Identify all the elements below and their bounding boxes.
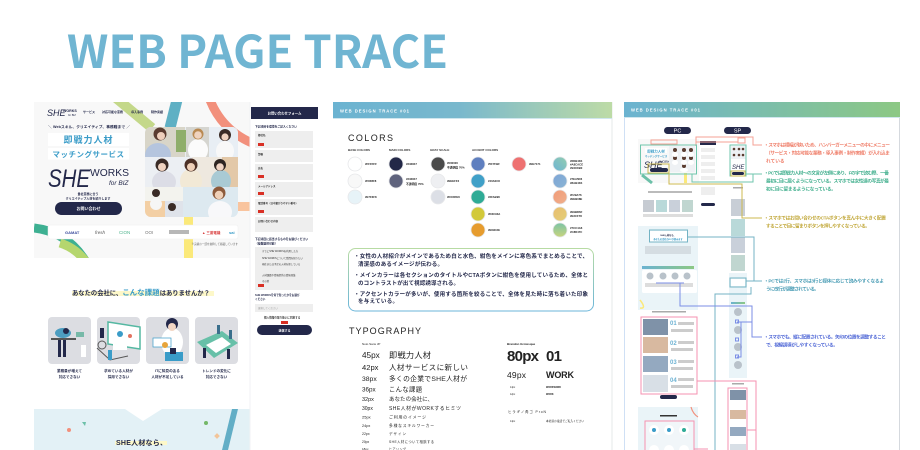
color codes: #A8CACE (570, 162, 583, 166)
form fields: 御社名 (258, 133, 266, 137)
hero photo collage (145, 127, 238, 223)
panel header (333, 102, 612, 119)
color codes: #EEEFF2 (447, 179, 460, 183)
SHE WORKS for BIZ logo: WORKS (90, 167, 129, 179)
type scale: Noto Sans JP: 22px (362, 432, 370, 436)
hero tagline: ＼ Webスキル、クリエイティブ、事務職まで ／ (48, 124, 130, 129)
type scale: Noto Sans JP: 25px (362, 414, 371, 420)
problem captions: 対応できない (59, 374, 81, 379)
problem captions: 業務量が増えて (57, 368, 82, 373)
panel header: WEB DESIGN TRACE #01 (340, 108, 410, 114)
PC problems thumbnail (643, 191, 693, 217)
PC benefits thumbnail (642, 311, 696, 399)
PC hero thumbnail: マッチングサービス (645, 154, 668, 158)
annotation connectors (640, 137, 762, 450)
design notes callout: ・アクセントカラーが多いが、使用する箇所を絞ることで、全体を見た時に落ち着いた印象 (354, 290, 588, 298)
form fields: 氏名 (258, 166, 264, 170)
type scale: Brandon Grotesque: 14px (510, 386, 516, 389)
design notes callout: ・メインカラーは各セクションのタイトルやCTAボタンに紺色を使用しているため、全体と (354, 271, 588, 279)
type scale: Noto Sans JP: こんな課題 (389, 386, 423, 394)
design notes callout: のコントラストが出て視認誘導される。 (358, 279, 459, 287)
PC hero thumbnail: WORKS (659, 160, 673, 164)
annotation: hero layout (764, 170, 889, 192)
section: SHE talent: SHE人材なら、 (116, 438, 167, 447)
form select and button: ください (255, 297, 266, 301)
type scale: Noto Sans JP (362, 342, 468, 450)
type scale: Noto Sans JP: 24px (362, 424, 370, 428)
form select and button: 個人情報の取り扱いに同意する (264, 316, 301, 320)
connector: purple arrows (656, 283, 762, 358)
section: SHE talent (34, 409, 250, 450)
form header: お問い合わせフォーム (268, 110, 302, 116)
swatches: gradients (553, 157, 567, 237)
form checkbox block: 下記項目に該当するものをお選びください (255, 237, 308, 241)
color codes: #DCDFE6 (447, 195, 460, 199)
SHE WORKS for BIZ logo: SHE (48, 165, 90, 193)
swatches: main colors (389, 157, 403, 188)
panel: responsive design trace (624, 102, 900, 450)
swatches: base colors (348, 157, 362, 204)
hero section (34, 98, 252, 262)
type scale: Hiragino: ヒラギノ角ゴ ProN (508, 409, 547, 414)
color codes: #E9BD6F (570, 210, 583, 214)
PC label: PC (674, 129, 681, 135)
PC hero thumbnail: 即戦力人材 (647, 148, 665, 154)
color group labels: GRAY SCALE (430, 148, 449, 152)
SP label (724, 127, 751, 135)
form fields: 電話番号（日中繋がりやすい番号） (258, 201, 298, 205)
type scale: Hiragino (508, 409, 584, 423)
client logo bar: ▲ 三菱電機 (202, 230, 221, 235)
color codes: #E3CF78 (570, 214, 582, 218)
client note: ※実績の一部を抜粋して掲載しています (191, 242, 238, 246)
PC hero thumbnail (638, 139, 699, 183)
annotation: CTA: することで目に留まりボタンを押しやすくなっている。 (766, 222, 870, 230)
type scale: Brandon Grotesque: WORK (546, 370, 574, 380)
type scale: Brandon Grotesque (507, 342, 574, 396)
form select and button (255, 293, 313, 335)
type scale: Brandon Grotesque: Brandon Grotesque (507, 342, 536, 346)
annotation: arrow position: で、視線誘導がしやすくなっている。 (766, 342, 838, 348)
color codes: #E7F3F8 (365, 195, 377, 199)
annotation: navigation: ・スマホは横幅が狭いため、ハンバーガーメニューの中にメニュー (764, 142, 890, 148)
form fields (255, 124, 313, 232)
color codes: #7CC4A6 (570, 226, 583, 230)
site logo: for BIZ (68, 113, 76, 117)
annotation: CTA: ・スマホではお問い合わせのCTAボタンを真ん中に大きく配置 (764, 214, 886, 222)
type scale: Noto Sans JP: Noto Sans JP (362, 342, 380, 346)
SHE WORKS for BIZ logo (48, 165, 130, 193)
PC services thumbnail (638, 407, 698, 450)
headline box: マッチングサービス: マッチングサービス (52, 149, 124, 159)
site logo: SHE (47, 108, 67, 118)
color codes: #232847 (406, 162, 417, 166)
design notes callout: ・女性の人材紹介がメインであるため白と水色、紺色をメインに寒色系でまとめることで、 (354, 252, 588, 260)
navigation: サービス (83, 109, 95, 114)
color codes: #232847 (406, 177, 417, 181)
PC benefits thumbnail: 03 (670, 360, 677, 366)
navigation: 対応可能な業務 (102, 109, 123, 114)
type scale: Brandon Grotesque: 12px (510, 393, 516, 396)
color group labels: BASE COLORS (348, 148, 370, 152)
problem card 3 (146, 317, 189, 364)
color codes: #000000 (447, 161, 458, 165)
hero copy: クリエイティブ人材を紹介します (66, 196, 110, 200)
problem captions: 採用できない (108, 374, 130, 379)
type scale: Noto Sans JP: 30px (362, 406, 373, 412)
design notes callout (348, 248, 594, 311)
CTA button: お問い合わせ (76, 205, 100, 211)
form checkbox block (255, 237, 313, 290)
form checkbox block: （複数選択可能） (255, 242, 277, 246)
form checkbox block: すでにSHE WORKSを利用した方 (262, 249, 299, 253)
annotation: navigation: れている (766, 158, 785, 164)
panel header (624, 102, 900, 118)
site logo (47, 108, 77, 118)
color group labels: MAIN COLORS (389, 148, 410, 152)
PC hero thumbnail: SHE (644, 160, 664, 170)
annotation: navigation: （サービス・対応可能な業務・導入事例・制作実績）が入れ込ま (766, 150, 890, 156)
type scale: Noto Sans JP: 38px (362, 376, 377, 383)
problem card 1 (48, 317, 91, 364)
SP mockup: SHE (732, 165, 745, 171)
problem captions: 対応できない (206, 374, 228, 379)
PC SHE section thumbnail (638, 226, 698, 310)
color codes: #5F7FBF (488, 162, 500, 166)
color codes: #7EA5D6 (570, 177, 583, 181)
connector: yellow CTA (648, 164, 762, 218)
color codes: #8AB4D4 (570, 181, 583, 185)
headline box: マッチングサービス (48, 148, 129, 160)
color codes: #D2C93A (488, 212, 500, 216)
form checkbox block: 人材課題や情報提供の情報収集 (262, 273, 296, 277)
form checkbox block: 現在または予定の人材を探している (262, 262, 301, 266)
client logo bar: fresh (95, 230, 106, 235)
type scale: Hiragino: 14px (510, 420, 516, 423)
color codes: #6DB4D4 (570, 159, 583, 163)
type scale: Noto Sans JP: 人材サービスに新しい (389, 362, 468, 372)
navigation: 制作実績 (151, 109, 163, 114)
headline box: 即戦力人材: 即戦力人材 (63, 134, 114, 145)
type scale: Noto Sans JP: 即戦力人材 (389, 350, 431, 360)
PC benefits thumbnail: 01 (670, 321, 677, 327)
form checkbox block: その他 (262, 279, 270, 283)
panel: web page screenshot (34, 98, 318, 450)
color codes: #EEB08E (570, 197, 582, 201)
PC SHE section thumbnail: あなたの会社のDXが進みます (653, 237, 683, 241)
problem captions: 求めている人材が (104, 368, 133, 373)
PC label (664, 127, 691, 135)
annotation: text wrapping (764, 278, 884, 292)
design notes callout: を与えている。 (358, 297, 398, 305)
color codes: #93CDB0 (570, 166, 583, 170)
type scale: Noto Sans JP: 42px (362, 363, 379, 372)
annotation: arrow position (764, 334, 886, 348)
contact form sidebar (250, 102, 318, 450)
problem card 2 (97, 317, 140, 364)
form select and button: 選択してください (258, 306, 278, 310)
PC benefits thumbnail: 04 (670, 378, 677, 384)
color codes: #C8D47C (570, 230, 582, 234)
color group labels (348, 148, 498, 152)
color codes: #F29A76 (570, 193, 582, 197)
type scale: Noto Sans JP: 32px (362, 397, 374, 403)
problem captions: ITに知見のある (155, 368, 180, 373)
color codes: 不透明度 70% (447, 166, 465, 170)
problem captions (57, 368, 231, 379)
SHE WORKS for BIZ logo: for BIZ (109, 180, 130, 187)
headline box: 即戦力人材 (48, 133, 129, 146)
type scale: Noto Sans JP: 36px (362, 386, 377, 394)
type scale: Brandon Grotesque: 01 (546, 348, 562, 365)
type scale: Noto Sans JP: 20px (362, 440, 370, 444)
type scale: Noto Sans JP: デザイン (389, 431, 406, 436)
PC SHE section thumbnail: SHE人材なら、 (660, 233, 676, 237)
PC mockup (638, 139, 699, 450)
hero copy (66, 191, 110, 200)
navigation (83, 109, 163, 114)
swatches: accent colors (471, 157, 526, 237)
annotation: hero layout: 初に目に留まるようになっている。 (766, 186, 836, 192)
color codes: #F8F8F8 (365, 179, 377, 183)
problem captions: トレンドの変化に (202, 368, 231, 373)
color codes: #EE7171 (529, 162, 541, 166)
colors heading: COLORS (348, 133, 393, 143)
form header (251, 107, 318, 119)
SP mockup (729, 139, 747, 450)
swatches: gray scale (431, 157, 445, 204)
annotation: hero layout: ・PCでは即戦力人材〜の文言が左側にあり、Fの字で読む際、一番 (764, 170, 889, 176)
annotation: CTA (764, 214, 886, 230)
client logo bar: GAMAT (65, 230, 80, 235)
color codes: 不透明度 70% (406, 182, 424, 186)
hero copy: 貴社業務に合う (77, 191, 99, 196)
problems heading: あなたの会社に、こんな課題はありませんか？ (72, 288, 210, 297)
type scale: Noto Sans JP: 多くの企業でSHE人材が (389, 374, 467, 383)
panel: colors and typography (333, 102, 612, 450)
annotation: text wrapping: うに改行が調整されている。 (766, 286, 819, 292)
annotation: arrow position: ・スマホでも、縦に配置されている。矢印の位置を調整すること (764, 334, 886, 340)
color codes: #E69C2E (488, 228, 500, 232)
type scale: Noto Sans JP: SHE人材について相談する (389, 439, 434, 444)
client logo bar: sai (229, 230, 235, 235)
type scale: Brandon Grotesque: WORK (546, 393, 554, 396)
design notes callout: 清潔感のあるイメージが伝わる。 (358, 260, 443, 268)
type scale: Noto Sans JP: 45px (362, 351, 380, 360)
site logo: WORKS (63, 109, 77, 113)
color codes: #FFFFFF (365, 162, 377, 166)
type scale: Noto Sans JP: ご利用のイメージ (389, 414, 426, 420)
connector: teal text layout (650, 230, 762, 450)
type scale: Noto Sans JP: あなたの会社に、 (389, 395, 433, 403)
color codes: #2FAB96 (488, 195, 500, 199)
client logo bar: OOI (145, 230, 153, 235)
PC benefits thumbnail: 02 (670, 341, 677, 347)
client logo bar: CION (119, 230, 130, 235)
navigation: 導入事例 (131, 109, 143, 114)
problem card 4 (195, 317, 238, 364)
type scale: Brandon Grotesque: 49px (507, 370, 527, 380)
form checkbox block: SHE WORKSについて質問を知りたい (262, 256, 303, 260)
form select and button: SHE WORKSを何で知ったかをお選び (255, 293, 300, 297)
annotation: navigation (764, 142, 890, 164)
annotation: text wrapping: ・PCでは2行、スマホは3行と媒体に応じて読みやすくなるよ (764, 278, 884, 284)
annotation: hero layout: 最初に目に届くようになっている。スマホでは女性達の写真が最 (766, 178, 889, 184)
client logo bar (48, 225, 238, 239)
type scale: Brandon Grotesque: WORKWORK (546, 386, 561, 389)
typography heading: TYPOGRAPHY (349, 326, 421, 336)
connector: pink cards (641, 317, 756, 450)
form fields: お問い合わせ内容 (258, 219, 279, 223)
type scale: Brandon Grotesque: 80px (507, 348, 540, 365)
panel header: WEB DESIGN TRACE #01 (631, 108, 701, 112)
SP label: SP (734, 129, 741, 135)
type scale: Hiragino: 本社屋の電話でご転入ください (546, 419, 584, 423)
connector: green hero (640, 145, 762, 182)
hero ribbons (34, 98, 252, 262)
type scale: Noto Sans JP: SHE人材がWORKするヒミツ (389, 405, 461, 412)
form fields: 下記項目を環境をご記入ください (255, 124, 297, 128)
color codes (365, 159, 583, 234)
form select and button: 送信する (278, 328, 291, 332)
type scale: Noto Sans JP: 多様なスキルワーカー (389, 423, 434, 428)
form fields: 部署 (258, 152, 264, 156)
section: problems (48, 288, 238, 379)
title: WEB PAGE TRACE (67, 16, 448, 81)
connector: red navigation (651, 137, 762, 146)
CTA button (55, 202, 122, 215)
color group labels: ACCENT COLORS (472, 148, 498, 152)
problem captions: 人材が不足している (151, 374, 184, 379)
color codes: #40A0C8 (488, 179, 500, 183)
PC form thumbnail (699, 139, 716, 209)
form fields: メールアドレス (258, 184, 276, 188)
